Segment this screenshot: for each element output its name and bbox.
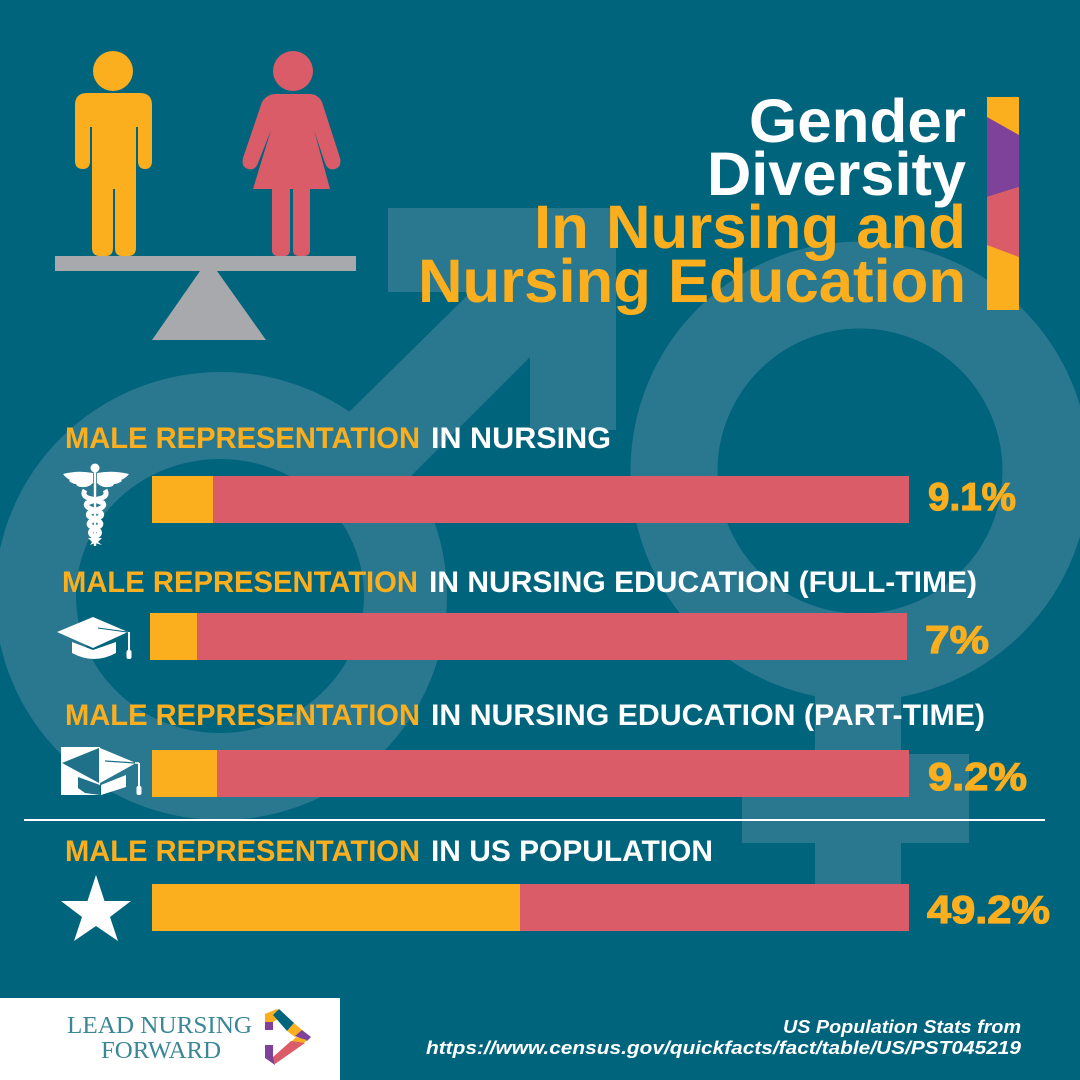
row: male representation in nursing education part-time: [61, 699, 1027, 799]
title: Diversity: [707, 140, 966, 208]
logo wordmark: FORWARD: [101, 1038, 221, 1064]
icon: star: [61, 875, 131, 941]
heading: us population: IN US POPULATION: [431, 835, 713, 868]
icon: man figure: [75, 51, 152, 256]
logo arrow mark: [265, 1009, 311, 1065]
background: female symbol: [674, 285, 1046, 900]
source note: [426, 1017, 1021, 1058]
bar: 49.2%: [152, 884, 909, 931]
value: 9.1%: 9.1%: [928, 476, 1016, 519]
background: male symbol: [0, 208, 616, 820]
heading: part-time: IN NURSING EDUCATION (PART-TIME): [431, 699, 985, 732]
heading: full-time: [62, 566, 977, 599]
heading: in nursing: [65, 422, 611, 455]
title: [418, 87, 966, 315]
source note: https://www.census.gov/quickfacts/fact/table/US/PST045219: [426, 1038, 1021, 1058]
value: 7%: 7%: [925, 619, 989, 662]
source note: US Population Stats from: [783, 1017, 1021, 1037]
value: 9.2%: 9.2%: [928, 756, 1027, 799]
bar: 9.1%: [152, 476, 909, 523]
title: Nursing Education: [418, 247, 966, 315]
icon: fulcrum: [152, 271, 266, 340]
title: In Nursing and: [534, 193, 966, 261]
bar: 9.2%: [152, 750, 909, 797]
value: 49.2%: 49.2%: [927, 889, 1050, 932]
logo panel: lead nursing forward: [0, 998, 340, 1080]
heading: us population: [65, 835, 713, 868]
icon: woman figure: [243, 51, 340, 256]
icon: caduceus: [63, 464, 129, 546]
title: Gender: [749, 87, 966, 155]
title color stripe: [987, 97, 1019, 310]
logo wordmark: [67, 1013, 252, 1064]
heading: part-time: MALE REPRESENTATION: [65, 699, 420, 732]
row: male representation in nursing: [63, 422, 1016, 546]
row: male representation in us population: [61, 835, 1050, 941]
icon: part-time cap: [61, 747, 142, 795]
icon: graduation cap: [57, 617, 132, 659]
heading: full-time: MALE REPRESENTATION: [62, 566, 418, 599]
heading: in nursing: MALE REPRESENTATION: [65, 422, 420, 455]
heading: part-time: [65, 699, 985, 732]
heading: full-time: IN NURSING EDUCATION (FULL-TIME): [429, 566, 977, 599]
heading: us population: MALE REPRESENTATION: [65, 835, 420, 868]
row: male representation in nursing education full-time: [57, 566, 989, 662]
bar: 7%: [150, 613, 907, 660]
icon: plank: [55, 256, 356, 271]
icon: balance scale with man and woman: [55, 51, 356, 340]
heading: in nursing: IN NURSING: [431, 422, 611, 455]
logo wordmark: LEAD NURSING: [67, 1013, 252, 1039]
